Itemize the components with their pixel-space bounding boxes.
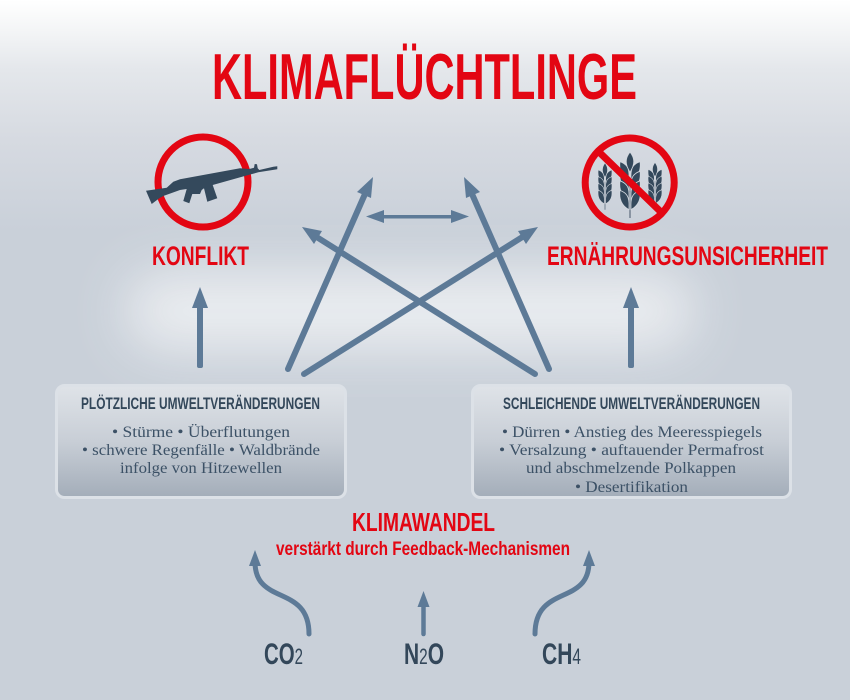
icon: rifle in circle — [146, 137, 277, 227]
arrow: CH4 — [535, 550, 595, 634]
text: sudden changes list: • schwere Regenfälle • Waldbrände — [82, 442, 320, 459]
arrow: right box to food side — [464, 177, 549, 369]
arrow: left box to food side — [304, 227, 538, 374]
icon: crossed-out wheat — [585, 138, 674, 227]
text: gradual changes list: • Dürren • Anstieg des Meeresspiegels — [502, 424, 762, 441]
arrow: left box to conflict side — [288, 177, 373, 369]
subheading: feedback: verstärkt durch Feedback-Mechanismen — [276, 539, 570, 560]
text: gradual changes list: • Desertifikation — [575, 479, 688, 496]
text: sudden changes list: • Stürme • Überflutungen — [112, 423, 290, 441]
panel: gradual changes — [472, 386, 790, 498]
text: gradual changes list — [499, 424, 765, 496]
text: gradual changes list: • Versalzung • auftauender Permafrost — [499, 442, 765, 459]
panel: sudden changes — [56, 386, 346, 498]
heading: sudden changes: PLÖTZLICHE UMWELTVERÄNDERUNGEN — [81, 394, 320, 413]
arrow: to Konflikt — [192, 287, 208, 368]
label: N2O: N2O — [404, 638, 444, 671]
label: CO2: CO2 — [264, 638, 303, 671]
text: sudden changes list — [82, 423, 320, 477]
arrow: right box to conflict side — [302, 227, 535, 374]
arrow: N2O — [418, 591, 430, 634]
heading: Klimawandel: KLIMAWANDEL — [352, 507, 495, 537]
arrow: CO2 — [249, 550, 309, 634]
arrow: to Ernährungsunsicherheit — [623, 287, 639, 368]
heading: Konflikt: KONFLIKT — [152, 241, 249, 271]
arrow: double between conflict and food — [366, 210, 469, 223]
text: sudden changes list: infolge von Hitzewellen — [120, 460, 282, 477]
text: gradual changes list: und abschmelzende Polkappen — [526, 460, 736, 477]
label: CH4: CH4 — [542, 638, 581, 671]
